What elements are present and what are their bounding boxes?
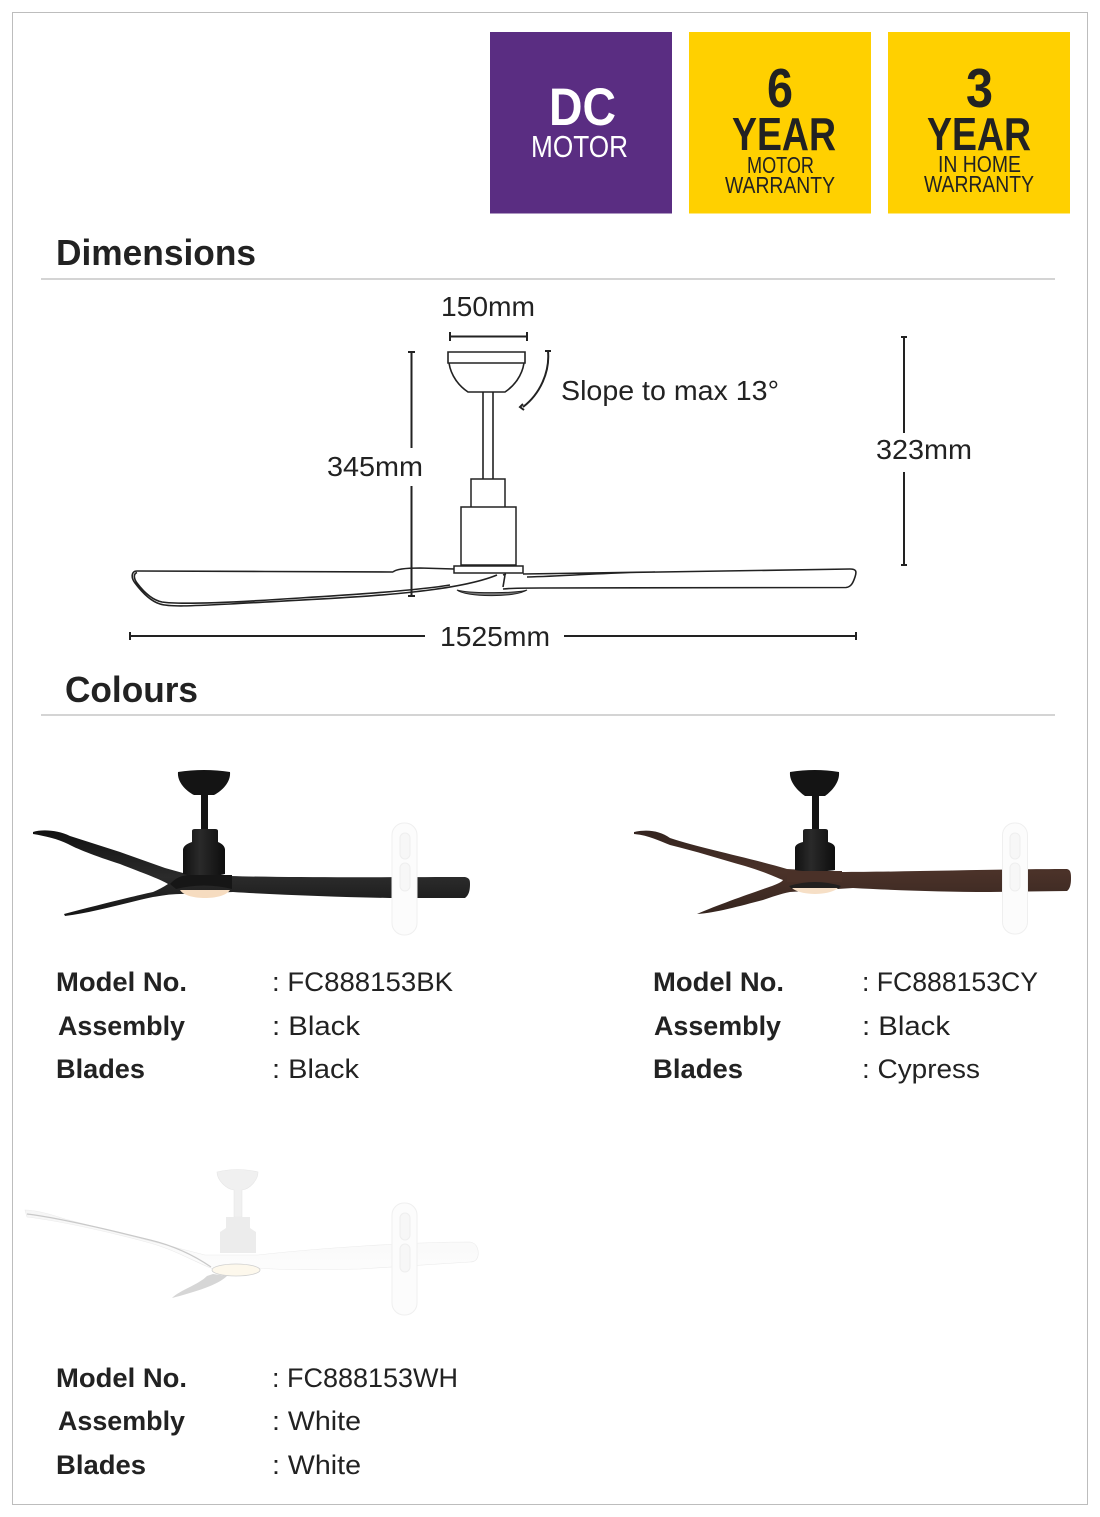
dimension: 150mm: 150mm [441,291,535,322]
dimension: 345mm: 345mm [327,451,423,482]
white left blade edge [27,1214,211,1267]
spec list: white model [56,1363,458,1480]
badge: 3 year in home warranty: YEAR [927,108,1031,160]
dimension: 323mm [876,337,972,565]
spec list: black model: Blades [56,1054,145,1084]
spec list: cypress model: Blades [653,1054,743,1084]
left blade outline [132,568,497,606]
dimension: slope to max 13 degrees [520,351,779,410]
dimension: 1525mm [130,621,856,652]
spec list: cypress model: Model No. [653,967,784,997]
right blade outline [503,569,856,589]
spec list: black model: : Black [272,1054,360,1084]
light dish outline [457,590,527,596]
spec list: black model: Model No. [56,967,187,997]
badge: 6 year motor warranty: MOTOR [747,152,814,178]
black fan light [170,875,232,898]
spec list: black model: : FC888153BK [272,967,453,997]
remote control [392,823,417,935]
badge: DC motor [490,32,672,214]
product photo: white fan [25,1170,478,1315]
cypress canopy and rod [790,770,839,830]
black motor [183,829,225,876]
spec list: cypress model: Assembly [654,1011,781,1041]
dimension: 1525mm: 1525mm [440,621,550,652]
motor housing outline [454,479,523,573]
spec list: white model: Blades [56,1450,146,1480]
black blades [33,830,470,916]
spec list: black model [56,967,453,1084]
spec list: cypress model: : Black [862,1011,951,1041]
heading: Colours: Colours [65,669,198,710]
spec list: black model: Assembly [58,1011,185,1041]
cypress motor [795,829,835,872]
spec list: cypress model: : FC888153CY [862,967,1038,997]
badge: 3 year in home warranty: 3 [966,57,993,119]
dimension: slope to max 13 degrees: Slope to max 13° [561,375,779,406]
badge: DC motor: DC [549,78,616,137]
spec list: white model: : White [272,1406,361,1436]
spec list: white model: : White [272,1450,361,1480]
badge: 3 year in home warranty [888,32,1070,214]
dimension: 150mm [441,291,535,341]
dimension: 345mm [327,352,423,596]
black canopy and rod [178,770,230,830]
dimension drawing: fan line diagram [132,352,856,606]
product photo: cypress fan [634,770,1071,934]
spec list: cypress model: : Cypress [862,1054,980,1084]
remote control [392,1203,417,1315]
spec list: cypress model [653,967,1038,1084]
badge: 6 year motor warranty: YEAR [732,108,836,160]
badge: 3 year in home warranty: IN HOME [938,151,1021,177]
heading: Dimensions: Dimensions [56,232,256,273]
badge: 6 year motor warranty: 6 [767,57,793,119]
cypress blades [634,831,1071,914]
badge: DC motor: MOTOR [531,129,628,164]
badge: 3 year in home warranty: WARRANTY [924,171,1034,197]
spec list: black model: : Black [272,1011,361,1041]
spec list: white model: Model No. [56,1363,187,1393]
white canopy and rod [217,1170,258,1217]
cypress fan light [787,871,842,894]
downrod outline [483,392,493,479]
spec list: white model: : FC888153WH [272,1363,458,1393]
white fan light [212,1264,260,1276]
white motor [220,1217,256,1253]
canopy outline [448,352,525,392]
badge: 6 year motor warranty: WARRANTY [725,172,835,198]
spec list: white model: Assembly [58,1406,185,1436]
white blades [25,1210,478,1275]
remote control [1002,823,1028,934]
dimension: 323mm: 323mm [876,434,972,465]
product photo: black fan [33,770,470,935]
badge: 6 year motor warranty [689,32,871,214]
white lower blade [172,1274,227,1298]
